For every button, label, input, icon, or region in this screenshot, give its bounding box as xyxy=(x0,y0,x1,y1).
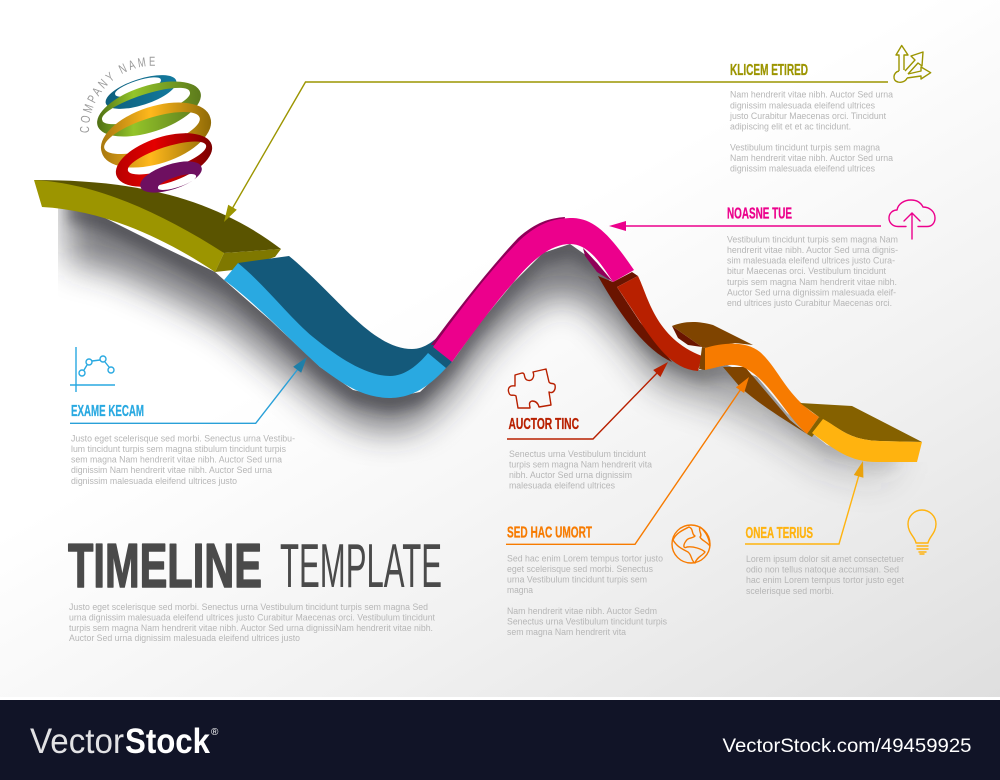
blue arrow xyxy=(70,357,307,423)
intro text: Justo eget scelerisque sed morbi. Senectus urna Vestibulum tincidunt turpis sem magna Sed xyxy=(69,602,428,612)
title: TEMPLATE xyxy=(280,532,442,601)
ribbon shadows xyxy=(68,170,900,485)
segment 1: olive xyxy=(34,180,281,272)
body text: malesuada eleifend ultrices xyxy=(509,481,615,491)
intro text: Auctor Sed urna dignissim malesuada eleifend ultrices justo xyxy=(69,633,300,643)
body text: sim malesuada eleifend ultrices justo Cura- xyxy=(727,256,895,266)
company name: COMPANY NAME xyxy=(80,56,155,132)
logo: company sphere xyxy=(80,56,212,193)
body text xyxy=(729,90,893,174)
footer branding: Stock xyxy=(125,722,210,761)
body text: bitur Maecenas orci. Vestibulum tincidunt xyxy=(727,266,886,276)
timeline ribbon xyxy=(34,180,922,462)
heading: NOASNE TUE xyxy=(727,205,792,222)
icon: line chart xyxy=(70,347,115,392)
amber arrow xyxy=(745,461,863,544)
body text: dignissim Nam hendrerit vitae nibh. Auctor Sed urna xyxy=(71,465,272,475)
segment 4: red xyxy=(598,272,702,371)
body text: scelerisque sed morbi. xyxy=(746,586,834,596)
heading: AUCTOR TINC xyxy=(508,416,579,433)
body text xyxy=(507,554,667,637)
body text: Vestibulum tincidunt turpis sem magna Nam xyxy=(727,234,898,244)
intro text xyxy=(69,602,435,643)
body text xyxy=(746,554,904,596)
body text xyxy=(727,234,898,308)
body text: urna Vestibulum tincidunt turpis sem xyxy=(507,575,647,585)
body text: dignissim malesuada eleifend ultrices xyxy=(730,164,875,174)
panel: Klicem Etired xyxy=(224,46,931,222)
body text: lum tincidunt turpis sem magna stibulum tincidunt turpis xyxy=(71,444,286,454)
heading: EXAME KECAM xyxy=(71,403,144,420)
intro text: urna dignissim malesuada eleifend ultrices justo Curabitur Maecenas orci. Vestibulum tincidunt xyxy=(69,612,435,622)
segment 2: blue xyxy=(224,256,452,398)
orange arrow xyxy=(506,377,749,544)
body text: Nam hendrerit vitae nibh. Auctor Sed urna xyxy=(730,90,893,100)
body text: Nam hendrerit vitae nibh. Auctor Sed urna xyxy=(730,153,893,163)
icon: globe xyxy=(672,525,710,563)
panel: Noasne Tue xyxy=(609,200,935,308)
icon: light bulb xyxy=(908,510,936,554)
footer branding: Vector xyxy=(30,722,124,761)
body text: sem magna Nam hendrerit vita xyxy=(507,627,626,637)
body text: hendrerit vitae nibh. Auctor Sed urna dignis- xyxy=(727,245,898,255)
body text: Auctor Sed urna dignissim malesuada eleif- xyxy=(727,287,896,297)
body text: adipiscing elit et et ac tincidunt. xyxy=(730,122,851,132)
body text: Sed hac enim Lorem tempus tortor justo xyxy=(507,554,663,564)
body text: magna xyxy=(507,585,533,595)
segment 6: amber xyxy=(800,403,922,462)
body text: Senectus urna Vestibulum tincidunt xyxy=(509,449,646,459)
body text: eget scelerisque sed morbi. Senectus xyxy=(507,564,653,574)
heading: KLICEM ETIRED xyxy=(730,62,808,79)
panel: Sed Hac Umort xyxy=(506,377,749,637)
footer branding: VectorStock.com/49459925 xyxy=(722,736,972,757)
body text: Lorem ipsum dolor sit amet consectetuer xyxy=(746,554,904,564)
body text: end ultrices justo Curabitur Maecenas orci. xyxy=(727,298,892,308)
magenta arrow xyxy=(609,221,881,231)
body text: dignissim malesuada eleifend ultrices justo xyxy=(71,476,237,486)
body text: turpis sem magna Nam hendrerit vita xyxy=(509,459,652,469)
icon: branching arrows xyxy=(894,46,931,82)
segment 5: orange xyxy=(672,322,819,434)
body text: sem magna Nam hendrerit vitae nibh. Auctor Sed urna xyxy=(71,455,282,465)
body text: dignissim malesuada eleifend ultrices xyxy=(730,100,875,110)
panel: Auctor Tinc xyxy=(507,362,668,491)
body text: Nam hendrerit vitae nibh. Auctor Sedm xyxy=(507,606,657,616)
body text: Vestibulum tincidunt turpis sem magna xyxy=(730,142,880,152)
panel: Onea Terius xyxy=(745,461,936,596)
body text: hac enim Lorem tempus tortor justo eget xyxy=(746,575,904,585)
body text: Justo eget scelerisque sed morbi. Senectus urna Vestibu- xyxy=(71,434,295,444)
body text xyxy=(509,449,652,491)
icon: puzzle piece xyxy=(508,369,555,408)
intro text: turpis sem magna Nam hendrerit vitae nibh. Auctor Sed urna dignissiNam hendrerit vitae nibh. xyxy=(69,623,433,633)
panel: Exame Kecam xyxy=(70,347,307,486)
icon: cloud upload xyxy=(889,200,935,239)
heading: ONEA TERIUS xyxy=(746,525,813,542)
heading: SED HAC UMORT xyxy=(507,525,592,542)
segment 3: magenta xyxy=(431,217,634,362)
olive arrow xyxy=(224,82,888,222)
footer branding xyxy=(30,722,972,761)
body text: Senectus urna Vestibulum tincidunt turpis xyxy=(507,617,667,627)
title: TIMELINE xyxy=(68,532,262,601)
body text: turpis sem magna Nam hendrerit vitae nibh. xyxy=(727,277,897,287)
footer branding: ® xyxy=(211,727,219,738)
body text: nibh. Auctor Sed urna dignissim xyxy=(509,470,632,480)
body text: odio non tellus natoque accumsan. Sed xyxy=(746,565,899,575)
sphere bands xyxy=(97,75,212,193)
body text xyxy=(71,434,295,486)
red arrow xyxy=(507,362,668,439)
body text: justo Curabitur Maecenas orci. Tincidunt xyxy=(729,111,886,121)
